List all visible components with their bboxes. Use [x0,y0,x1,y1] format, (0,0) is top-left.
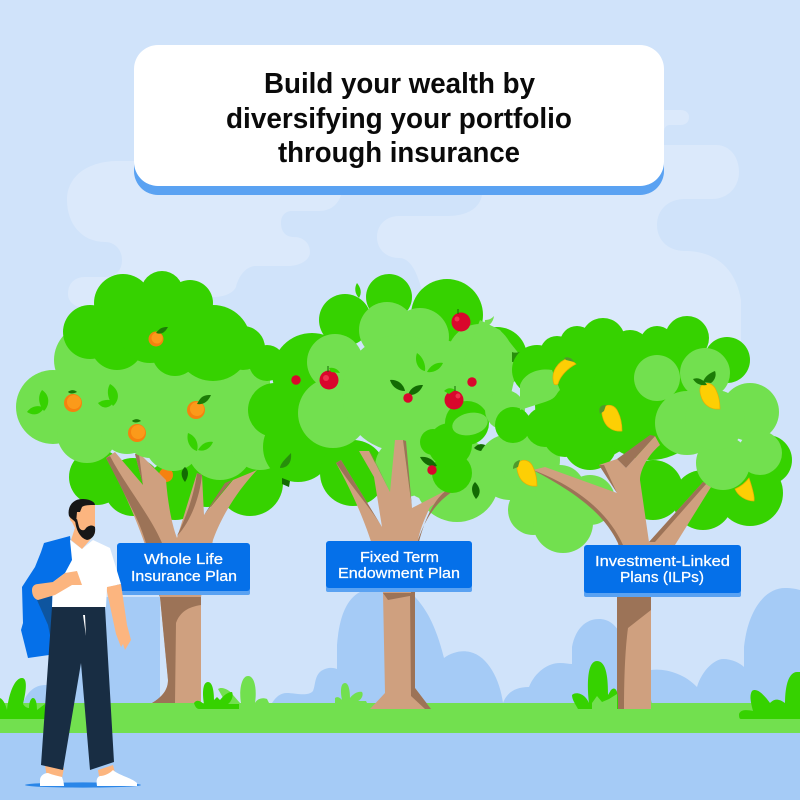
tree 1 trunk [106,452,257,703]
shirt [52,540,121,607]
bush: beside trunk 1 [194,676,269,709]
sign: ILPs [584,545,741,597]
bush: small light under tree 2 [335,683,370,709]
tree 2 inner dark clump [420,401,490,493]
tree 3 mangoes [513,357,754,501]
sign label: ILPs: Investment-Linked [595,553,730,570]
tree 3 left light foliage [477,390,615,553]
sign label: whole life: Whole Life [144,551,223,568]
title text: Build your wealth by [264,68,535,100]
tree 3 right light foliage [634,348,782,490]
tree 2 main light foliage [298,302,520,522]
sign label: fixed term: Endowment Plan [338,565,460,582]
tree 3 dark foliage [495,316,792,530]
bush: left of trunk 3 [572,661,653,709]
right arm [106,584,131,650]
jacket [21,536,73,658]
background hills [23,588,800,703]
ground strip [0,703,800,733]
trousers [41,607,114,770]
beard [75,519,95,540]
tree 1 light foliage [16,324,290,480]
sign label: whole life [131,551,237,585]
sign: whole life [117,543,250,595]
sign: fixed term [326,541,472,592]
shoes [40,770,137,786]
water path foreground [0,733,800,800]
tree 2 dark foliage [248,274,527,506]
tree 1 small orange behind canopy [159,468,173,482]
tree 2 leaves [280,350,528,499]
bush: far left [0,678,45,719]
hair [69,499,95,523]
title text: diversifying your portfolio [226,103,572,135]
sign label: whole life: Insurance Plan [131,568,237,585]
title text [226,68,572,169]
tree 3 trunk [533,435,711,709]
tree 2: endowment [248,274,528,709]
tree 3 inner light patch [520,370,560,410]
feet [45,765,116,782]
bush: far right [739,672,800,719]
background clouds [67,110,741,360]
left arm and fist [32,571,82,600]
neck and face [70,503,95,549]
tree 2 apples [291,309,477,475]
tree 3: ILP [477,316,792,709]
tree 1 leaves [27,384,213,451]
tree 2 trunk [336,440,452,709]
tree 1 oranges [64,327,211,482]
title card [134,45,664,195]
tree 1: whole life [16,271,290,703]
man with jacket [21,499,141,788]
sign label: ILPs [595,553,730,586]
sign label: fixed term [338,549,460,582]
shadow [25,782,141,788]
sign label: fixed term: Fixed Term [360,549,439,566]
title text: through insurance [278,137,520,169]
tree 1 lower dark foliage [69,447,283,520]
drawstring [83,615,86,636]
sign label: ILPs: Plans (ILPs) [620,569,704,586]
tree 1 upper dark foliage [63,271,285,381]
